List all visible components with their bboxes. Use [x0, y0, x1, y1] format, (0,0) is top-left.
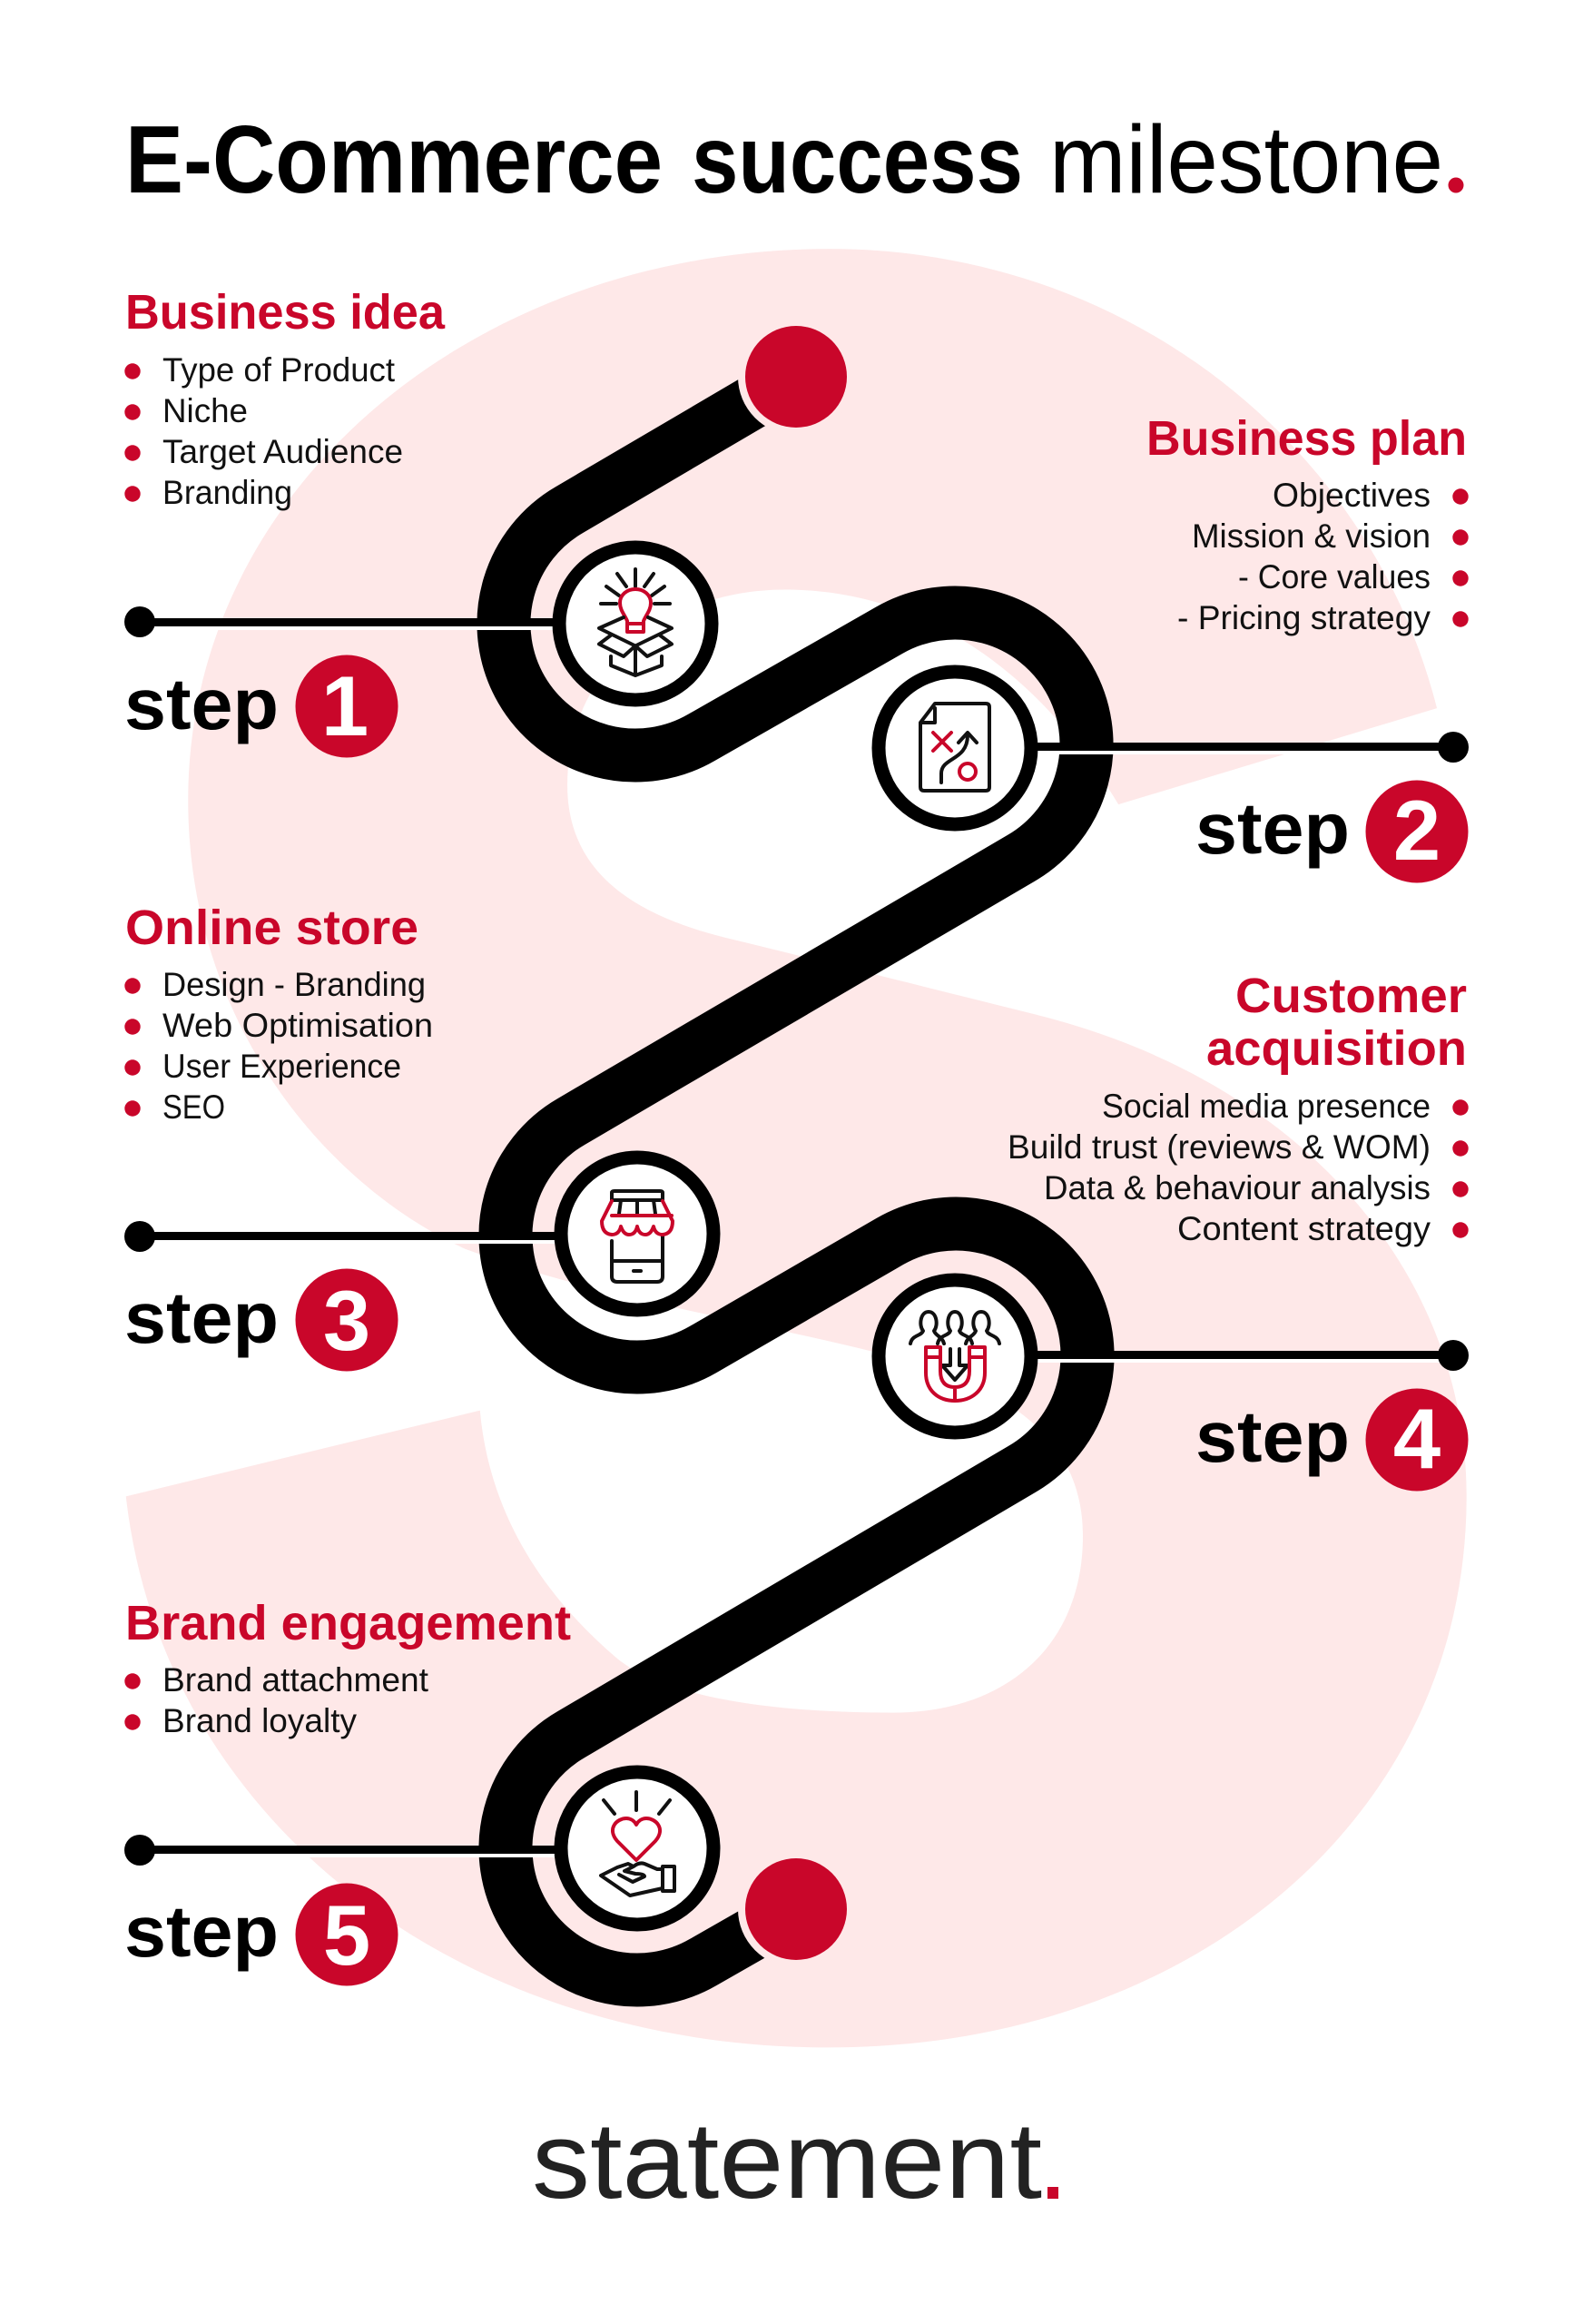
step 3 label — [124, 1269, 398, 1371]
heading: Business idea — [125, 285, 446, 340]
step 1 label: step — [124, 664, 279, 744]
bullet list: Build trust (reviews & WOM) — [1008, 1128, 1431, 1166]
bullet list — [124, 1661, 429, 1739]
heading: acquisition — [1206, 1021, 1467, 1076]
step 4 leader line — [1021, 1340, 1469, 1371]
winding black road path — [504, 377, 1087, 1980]
title: E-Commerce — [125, 106, 663, 213]
bullet list — [1008, 1088, 1469, 1247]
heading: Business plan — [1146, 411, 1467, 466]
step 4 label: step — [1195, 1396, 1350, 1477]
title — [125, 106, 1463, 213]
bullet list: Target Audience — [162, 433, 403, 470]
step 3 label: step — [124, 1277, 279, 1358]
panel: business idea — [124, 285, 446, 511]
bullet list: - Pricing strategy — [1177, 599, 1431, 636]
bullet list: Brand attachment — [162, 1661, 429, 1699]
bullet list: Niche — [162, 392, 248, 429]
panel: business plan — [1146, 411, 1469, 636]
end marker: red dot — [738, 1851, 854, 1967]
step 5 label: step — [124, 1891, 279, 1972]
bullet list: Type of Product — [162, 351, 396, 389]
step 2 leader line — [1021, 732, 1469, 763]
step 1 label — [124, 655, 398, 757]
step 2 label: 2 — [1393, 783, 1441, 878]
step 5 label: 5 — [323, 1887, 370, 1983]
icon: heart over open hand — [561, 1772, 713, 1925]
step 3 label: 3 — [323, 1273, 370, 1368]
icon: shop on a smartphone — [561, 1157, 713, 1310]
bullet list: SEO — [162, 1088, 225, 1126]
start marker: red dot — [738, 319, 854, 435]
panel: customer acquisition — [1008, 969, 1469, 1247]
icon: magnet attracting customers — [879, 1280, 1031, 1433]
bullet list: User Experience — [162, 1048, 401, 1085]
icon: strategy document — [879, 672, 1031, 824]
icon: idea bulb rising from a box — [559, 547, 712, 700]
bullet list: Data & behaviour analysis — [1044, 1169, 1431, 1206]
bullet list: Web Optimisation — [162, 1007, 433, 1044]
step 1 leader line — [124, 606, 575, 637]
bullet list: Mission & vision — [1192, 517, 1431, 555]
panel: brand engagement — [124, 1596, 571, 1739]
background: giant pink letter S — [126, 249, 1467, 2047]
step 5 leader line — [124, 1835, 575, 1866]
step 4 label — [1195, 1389, 1469, 1491]
bullet list: Branding — [162, 474, 292, 511]
step 1 label: 1 — [321, 658, 369, 753]
bullet list: - Core values — [1238, 558, 1431, 596]
bullet list — [124, 966, 433, 1126]
bullet list: Objectives — [1273, 477, 1431, 514]
bullet list: Design - Branding — [162, 966, 426, 1003]
step 2 label: step — [1195, 788, 1350, 869]
bullet list — [124, 351, 403, 511]
heading: Brand engagement — [125, 1596, 571, 1650]
heading — [1206, 969, 1467, 1076]
logo: statement.: statement — [532, 2100, 1042, 2221]
bullet list: Brand loyalty — [162, 1702, 357, 1739]
bullet list: Social media presence — [1102, 1088, 1431, 1125]
bullet list: Content strategy — [1177, 1210, 1431, 1247]
step 3 leader line — [124, 1221, 575, 1252]
bullet list — [1177, 477, 1469, 636]
panel: online store — [124, 901, 433, 1126]
heading: Customer — [1235, 969, 1467, 1023]
step 5 label — [124, 1883, 398, 1986]
step 4 label: 4 — [1393, 1391, 1441, 1486]
step 2 label — [1195, 781, 1469, 882]
title: milestone — [1049, 106, 1443, 213]
heading: Online store — [125, 901, 418, 955]
title: success — [692, 106, 1023, 213]
